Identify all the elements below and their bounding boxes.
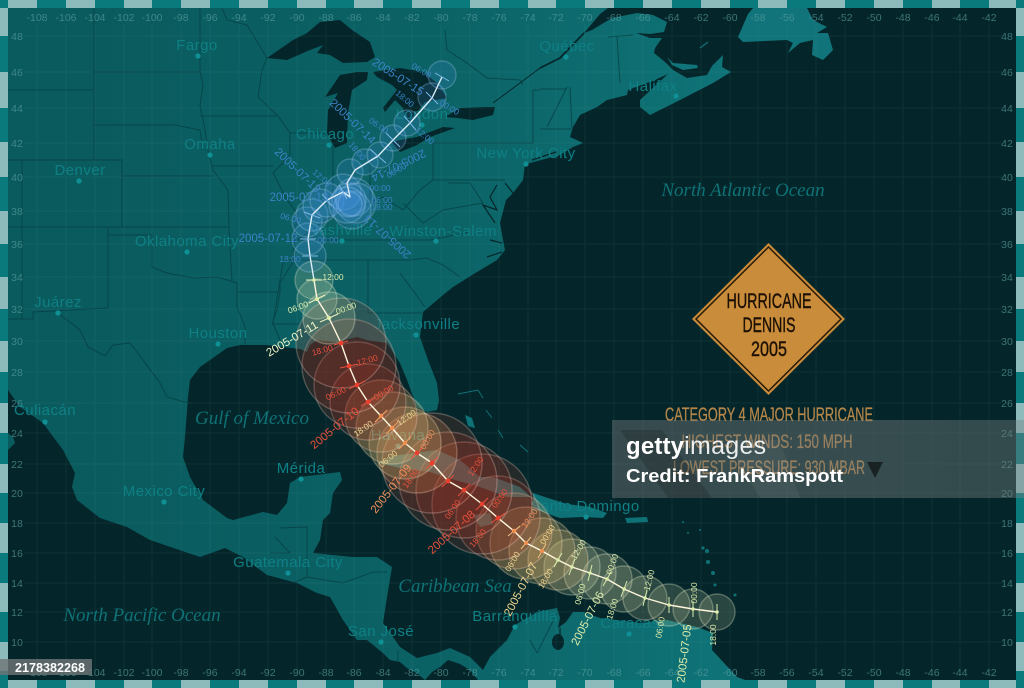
storm wind radius circles bbox=[292, 61, 735, 630]
axis labels: latitude left: 44 bbox=[11, 103, 23, 115]
city markers and names: Nashville bbox=[308, 222, 372, 239]
axis labels: longitude top: -92 bbox=[260, 12, 276, 24]
ocean names: Caribbean Sea bbox=[398, 576, 512, 597]
time labels along track: 06:00 bbox=[653, 616, 667, 639]
axis labels: latitude right: 16 bbox=[1001, 548, 1013, 560]
land: Newfoundland bbox=[738, 8, 833, 60]
time labels along track: 00:00 bbox=[385, 161, 408, 180]
date labels along track: 2005-07-13 bbox=[270, 192, 328, 204]
axis labels: latitude left: 32 bbox=[11, 304, 23, 316]
time labels along track bbox=[279, 61, 718, 646]
axis labels: latitude left: 38 bbox=[11, 206, 23, 218]
time labels along track: 06:00 bbox=[410, 61, 433, 80]
time labels along track: 00:00 bbox=[372, 383, 395, 402]
time labels along track: 18:00 bbox=[279, 254, 301, 264]
axis labels: latitude right: 48 bbox=[1001, 31, 1013, 43]
axis labels: longitude bottom: -58 bbox=[750, 667, 766, 679]
date labels along track: 2005-07-08 bbox=[426, 509, 478, 557]
axis labels: longitude bottom: -104 bbox=[84, 667, 106, 679]
axis labels: longitude bottom: -102 bbox=[113, 667, 135, 679]
axis labels: longitude bottom: -42 bbox=[981, 667, 997, 679]
axis labels: longitude bottom: -60 bbox=[722, 667, 738, 679]
axis labels: latitude left: 36 bbox=[11, 239, 23, 251]
axis labels: longitude bottom: -94 bbox=[231, 667, 247, 679]
axis labels: longitude top: -108 bbox=[26, 12, 48, 24]
axis labels: latitude right: 38 bbox=[1001, 206, 1013, 218]
axis labels: longitude top bbox=[26, 12, 997, 24]
city markers and names: Jacksonville bbox=[374, 316, 460, 333]
axis labels: latitude right: 22 bbox=[1001, 459, 1013, 471]
date labels along track: 2005-07-07 bbox=[502, 561, 540, 618]
axis labels: longitude bottom: -68 bbox=[606, 667, 622, 679]
axis labels: longitude top: -88 bbox=[318, 12, 334, 24]
axis labels: longitude bottom: -48 bbox=[895, 667, 911, 679]
axis labels: longitude bottom: -46 bbox=[924, 667, 940, 679]
storm statistics text: LOWEST PRESSURE: 930 MBAR bbox=[673, 458, 865, 479]
time labels along track: 06:00 bbox=[442, 497, 463, 521]
axis labels: longitude bottom: -64 bbox=[664, 667, 680, 679]
axis labels: longitude bottom: -86 bbox=[346, 667, 362, 679]
road sign: Hurricane Dennis 2005: 2005 bbox=[751, 338, 787, 361]
land: Jamaica bbox=[473, 513, 493, 527]
axis labels: longitude top: -72 bbox=[548, 12, 564, 24]
axis labels: longitude bottom: -76 bbox=[491, 667, 507, 679]
city markers and names: Oklahoma City bbox=[135, 233, 239, 250]
time labels along track: 18:00 bbox=[467, 527, 489, 549]
axis labels: longitude top: -78 bbox=[462, 12, 478, 24]
six-hour tick marks bbox=[300, 73, 717, 620]
axis labels: latitude right bbox=[1001, 31, 1013, 649]
time labels along track: 00:00 bbox=[489, 486, 510, 510]
time labels along track: 00:00 bbox=[604, 552, 621, 576]
axis labels: latitude right: 36 bbox=[1001, 239, 1013, 251]
axis labels: latitude left: 46 bbox=[11, 67, 23, 79]
city markers and names: San José bbox=[348, 623, 414, 640]
time labels along track: 18:00 bbox=[394, 88, 416, 110]
axis labels: latitude left: 30 bbox=[11, 336, 23, 348]
storm track line: upper bbox=[308, 77, 442, 280]
axis labels: latitude right: 42 bbox=[1001, 138, 1013, 150]
date labels along track: 2005-07-14 bbox=[327, 97, 378, 147]
axis labels: longitude bottom: -82 bbox=[404, 667, 420, 679]
water: rivers and bays bbox=[483, 33, 584, 636]
land: North and Central America bbox=[8, 8, 745, 680]
city markers and names: Culiacán bbox=[14, 402, 76, 419]
axis labels: latitude right: 28 bbox=[1001, 367, 1013, 379]
storm track line: lower bbox=[314, 280, 717, 612]
axis labels: longitude bottom: -98 bbox=[173, 667, 189, 679]
date labels along track: 2005-07-06 bbox=[570, 590, 607, 648]
date labels along track: 2005-07-10 bbox=[308, 405, 362, 452]
water: Great Lakes bbox=[267, 20, 564, 650]
land: Hispaniola bbox=[533, 493, 607, 518]
date labels along track: 2005-07-15 bbox=[370, 56, 426, 99]
storm statistics text: CATEGORY 4 MAJOR HURRICANE bbox=[665, 405, 873, 426]
land: Cuba bbox=[378, 450, 531, 497]
land: Puerto Rico bbox=[625, 517, 648, 523]
axis labels: longitude top: -52 bbox=[837, 12, 853, 24]
axis labels: longitude bottom: -108 bbox=[26, 667, 48, 679]
axis labels: longitude top: -56 bbox=[779, 12, 795, 24]
time labels along track: 12:00 bbox=[395, 407, 418, 428]
time labels along track: 12:00 bbox=[311, 167, 333, 189]
time labels along track: 06:00 bbox=[286, 299, 310, 316]
city markers and names bbox=[14, 37, 679, 645]
axis labels: latitude right: 44 bbox=[1001, 103, 1013, 115]
road sign: Hurricane Dennis 2005 bbox=[692, 243, 845, 395]
time labels along track: 00:00 bbox=[418, 428, 437, 451]
axis labels: longitude bottom: -44 bbox=[952, 667, 968, 679]
time labels along track: 06:00 bbox=[503, 550, 522, 573]
ocean names bbox=[62, 180, 825, 626]
axis labels: longitude bottom: -96 bbox=[202, 667, 218, 679]
axis labels: longitude top: -64 bbox=[664, 12, 680, 24]
axis labels: longitude top: -66 bbox=[635, 12, 651, 24]
axis labels: longitude top: -68 bbox=[606, 12, 622, 24]
city markers and names: Québec bbox=[539, 38, 595, 55]
axis labels: longitude bottom: -88 bbox=[318, 667, 334, 679]
watermark band bbox=[612, 420, 1024, 498]
axis labels: longitude bottom: -70 bbox=[577, 667, 593, 679]
axis labels: longitude top: -106 bbox=[55, 12, 77, 24]
axis labels: longitude bottom: -52 bbox=[837, 667, 853, 679]
city markers and names: Omaha bbox=[184, 136, 236, 153]
city markers and names: Havana bbox=[371, 427, 425, 444]
date labels along track bbox=[239, 56, 695, 684]
axis labels: longitude top: -42 bbox=[981, 12, 997, 24]
time labels along track: 12:00 bbox=[322, 272, 344, 282]
axis labels: longitude bottom: -50 bbox=[866, 667, 882, 679]
date labels along track: 2005-07-14 bbox=[369, 146, 427, 183]
axis labels: latitude left: 24 bbox=[11, 428, 23, 440]
date labels along track: 2005-07-12 bbox=[239, 233, 297, 245]
time labels along track: 00:00 bbox=[689, 582, 699, 604]
watermark logo text: gettyimages bbox=[626, 432, 766, 460]
image id tag: 2178382268 bbox=[15, 661, 85, 675]
axis labels: longitude top: -96 bbox=[202, 12, 218, 24]
time labels along track: 06:00 bbox=[279, 211, 303, 226]
land: Baja tip bbox=[8, 433, 15, 450]
axis labels: longitude bottom: -72 bbox=[548, 667, 564, 679]
city markers and names: Chicago bbox=[296, 126, 354, 143]
time labels along track: 18:00 bbox=[371, 202, 393, 212]
axis labels: longitude bottom: -78 bbox=[462, 667, 478, 679]
city markers and names: Caracas bbox=[600, 615, 660, 632]
axis labels: latitude left: 10 bbox=[11, 637, 23, 649]
axis labels: latitude left: 42 bbox=[11, 138, 23, 150]
time labels along track: 00:00 bbox=[334, 300, 358, 317]
ocean names: North Atlantic Ocean bbox=[660, 180, 825, 201]
time labels along track: 18:00 bbox=[400, 466, 421, 490]
time labels along track: 00:00 bbox=[438, 98, 461, 117]
storm statistics text bbox=[665, 405, 873, 479]
axis labels: longitude bottom: -84 bbox=[375, 667, 391, 679]
date labels along track: 2005-07-05 bbox=[675, 624, 695, 684]
axis labels: longitude bottom: -92 bbox=[260, 667, 276, 679]
time labels along track: 18:00 bbox=[347, 140, 368, 163]
axis labels: longitude bottom: -90 bbox=[289, 667, 305, 679]
axis labels: latitude right: 32 bbox=[1001, 304, 1013, 316]
axis labels: longitude top: -76 bbox=[491, 12, 507, 24]
axis labels: longitude top: -104 bbox=[84, 12, 106, 24]
city markers and names: Mérida bbox=[277, 460, 325, 477]
time labels along track: 18:00 bbox=[708, 624, 718, 646]
axis labels: latitude right: 20 bbox=[1001, 488, 1013, 500]
map: land and water bbox=[8, 8, 833, 680]
date labels along track: 2005-07-13 bbox=[362, 212, 414, 260]
axis labels: latitude left: 12 bbox=[11, 607, 23, 619]
axis labels: longitude top: -50 bbox=[866, 12, 882, 24]
axis labels: longitude bottom: -56 bbox=[779, 667, 795, 679]
time labels along track: 06:00 bbox=[367, 115, 391, 136]
time labels along track: 00:00 bbox=[317, 235, 339, 245]
axis labels: longitude top: -48 bbox=[895, 12, 911, 24]
axis labels: latitude right: 30 bbox=[1001, 336, 1013, 348]
axis labels: latitude left: 22 bbox=[11, 459, 23, 471]
date labels along track: 2005-07-09 bbox=[369, 462, 414, 516]
time labels along track: 12:00 bbox=[642, 568, 657, 592]
time labels along track: 06:00 bbox=[324, 384, 348, 402]
six-hour node dots bbox=[312, 278, 719, 614]
axis labels: longitude top: -82 bbox=[404, 12, 420, 24]
axis labels: longitude top: -58 bbox=[750, 12, 766, 24]
time labels along track: 12:00 bbox=[414, 125, 436, 147]
city markers and names: London bbox=[396, 106, 448, 123]
storm statistics text: HIGHEST WINDS: 150 MPH bbox=[682, 432, 852, 453]
axis labels: latitude left: 14 bbox=[11, 578, 23, 590]
city markers and names: Barranquilla bbox=[472, 608, 558, 625]
state and national borders bbox=[8, 8, 633, 662]
city markers and names: Fargo bbox=[176, 37, 218, 54]
axis labels: latitude left: 40 bbox=[11, 172, 23, 184]
date labels along track: 2005-07-11 bbox=[265, 319, 320, 360]
axis labels: longitude bottom: -80 bbox=[433, 667, 449, 679]
axis labels: longitude top: -80 bbox=[433, 12, 449, 24]
axis labels: latitude right: 46 bbox=[1001, 67, 1013, 79]
city markers and names: Denver bbox=[54, 162, 106, 179]
axis labels: longitude top: -94 bbox=[231, 12, 247, 24]
axis labels: longitude top: -100 bbox=[141, 12, 163, 24]
time labels along track: 00:00 bbox=[369, 183, 391, 193]
time labels along track: 18:00 bbox=[604, 597, 620, 621]
ocean names: North Pacific Ocean bbox=[62, 605, 221, 626]
axis labels: longitude bottom: -62 bbox=[693, 667, 709, 679]
city markers and names: Houston bbox=[188, 325, 248, 342]
axis labels: longitude top: -90 bbox=[289, 12, 305, 24]
axis labels: latitude right: 34 bbox=[1001, 272, 1013, 284]
axis labels: longitude top: -70 bbox=[577, 12, 593, 24]
axis labels: latitude right: 12 bbox=[1001, 607, 1013, 619]
axis labels: longitude top: -60 bbox=[722, 12, 738, 24]
axis labels: latitude left: 20 bbox=[11, 488, 23, 500]
axis labels: latitude left: 34 bbox=[11, 272, 23, 284]
axis labels: longitude top: -86 bbox=[346, 12, 362, 24]
time labels along track: 18:00 bbox=[352, 418, 375, 439]
land: small islands bbox=[458, 42, 736, 596]
axis labels: longitude top: -74 bbox=[520, 12, 536, 24]
city markers and names: Mexico City bbox=[123, 483, 205, 500]
axis labels: latitude left: 26 bbox=[11, 398, 23, 410]
axis labels: longitude top: -102 bbox=[113, 12, 135, 24]
time labels along track: 12:00 bbox=[519, 506, 540, 530]
axis labels: latitude right: 40 bbox=[1001, 172, 1013, 184]
axis labels: longitude bottom: -100 bbox=[141, 667, 163, 679]
axis labels: longitude top: -84 bbox=[375, 12, 391, 24]
city markers and names: Juárez bbox=[34, 294, 82, 311]
time labels along track: 12:00 bbox=[569, 538, 588, 561]
hurricane track bbox=[239, 56, 735, 684]
axis labels: latitude left: 28 bbox=[11, 367, 23, 379]
time labels along track: 18:00 bbox=[311, 342, 334, 358]
time labels along track: 12:00 bbox=[356, 352, 379, 368]
time labels along track: 00:00 bbox=[538, 523, 557, 546]
axis labels: longitude bottom: -106 bbox=[55, 667, 77, 679]
axis labels: latitude left bbox=[11, 31, 23, 649]
city markers and names: Halifax bbox=[628, 78, 678, 95]
axis labels: latitude left: 48 bbox=[11, 31, 23, 43]
axis labels: longitude top: -44 bbox=[952, 12, 968, 24]
axis labels: longitude top: -54 bbox=[808, 12, 824, 24]
city markers and names: Guatemala City bbox=[233, 554, 343, 571]
time labels along track: 12:00 bbox=[465, 454, 486, 478]
watermark credit: Credit: FrankRamspott bbox=[626, 465, 843, 486]
road sign: Hurricane Dennis 2005: HURRICANE bbox=[726, 290, 812, 313]
axis labels: longitude top: -98 bbox=[173, 12, 189, 24]
time labels along track: 06:00 bbox=[377, 448, 400, 469]
axis labels: latitude right: 10 bbox=[1001, 637, 1013, 649]
axis labels: longitude bottom: -54 bbox=[808, 667, 824, 679]
axis labels: longitude bottom: -66 bbox=[635, 667, 651, 679]
city markers and names: New York City bbox=[476, 145, 576, 162]
axis labels: latitude right: 24 bbox=[1001, 428, 1013, 440]
time labels along track: 06:00 bbox=[371, 195, 393, 205]
axis labels: latitude right: 18 bbox=[1001, 518, 1013, 530]
axis labels: longitude top: -46 bbox=[924, 12, 940, 24]
city markers and names: Santo Domingo bbox=[530, 498, 640, 515]
axis labels: longitude bottom: -74 bbox=[520, 667, 536, 679]
city markers and names: Winston-Salem bbox=[389, 223, 497, 240]
date labels along track: 2005-07-13 bbox=[272, 146, 322, 196]
land: Prince Edward Island bbox=[667, 57, 698, 70]
axis labels: longitude top: -62 bbox=[693, 12, 709, 24]
axis labels: latitude left: 18 bbox=[11, 518, 23, 530]
axis labels: latitude right: 26 bbox=[1001, 398, 1013, 410]
road sign: Hurricane Dennis 2005: DENNIS bbox=[742, 314, 796, 337]
axis labels: longitude bottom bbox=[26, 667, 997, 679]
ocean names: Gulf of Mexico bbox=[195, 408, 309, 429]
axis labels: latitude left: 16 bbox=[11, 548, 23, 560]
axis labels: latitude right: 14 bbox=[1001, 578, 1013, 590]
time labels along track: 18:00 bbox=[536, 567, 555, 590]
image id tag bbox=[0, 659, 92, 675]
time labels along track: 06:00 bbox=[573, 582, 588, 606]
